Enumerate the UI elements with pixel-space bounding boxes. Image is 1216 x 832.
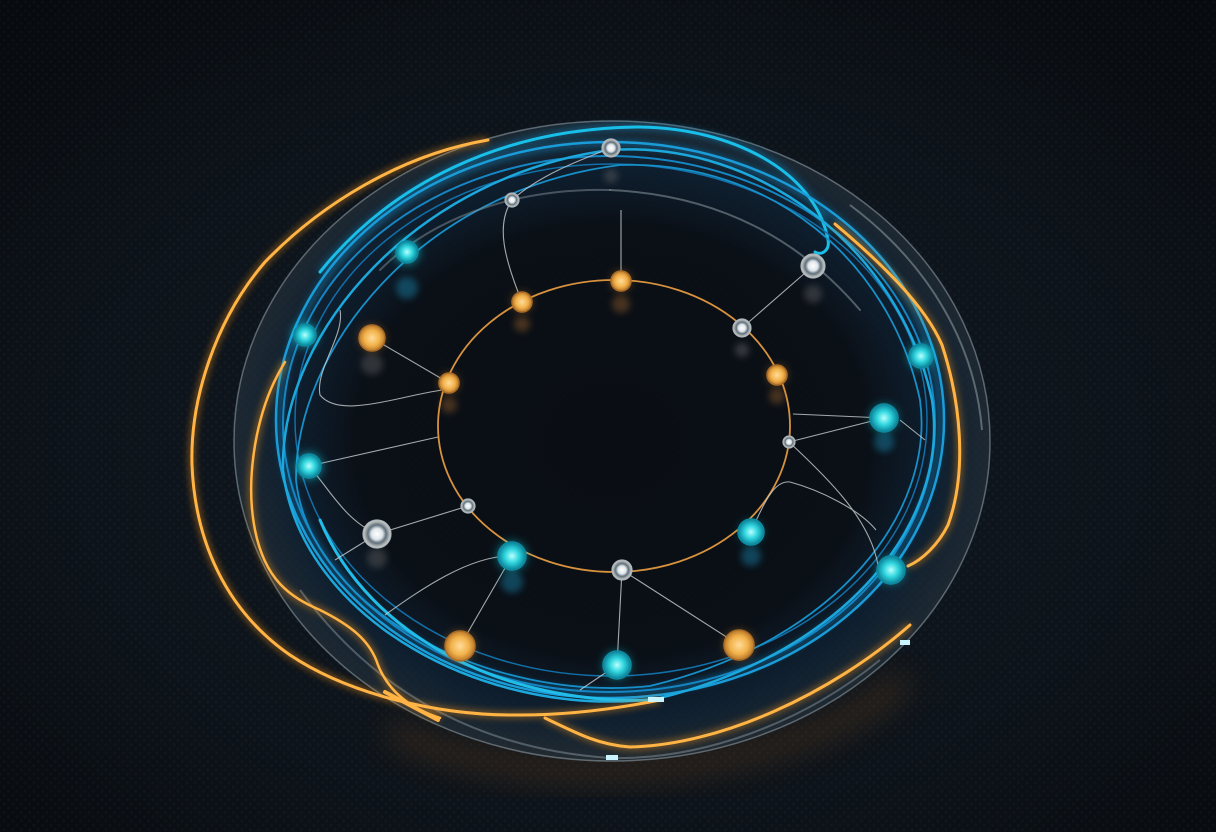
reflections below nodes: [361, 169, 894, 593]
inner orange ring: [438, 280, 790, 572]
bright fibre end caps: [606, 640, 910, 760]
thin connecting wires: [309, 148, 925, 690]
orange fibres: [192, 140, 960, 747]
blue ring glow: [280, 127, 940, 693]
white nodes: [363, 139, 825, 580]
glass disc: [234, 121, 990, 761]
blue fibre rings: [276, 127, 944, 701]
cyan nodes: [294, 241, 933, 679]
orange fibre glow: [192, 140, 960, 747]
orange floor reflection: [390, 680, 905, 770]
node glows: [293, 240, 933, 678]
orange nodes: [359, 271, 787, 661]
